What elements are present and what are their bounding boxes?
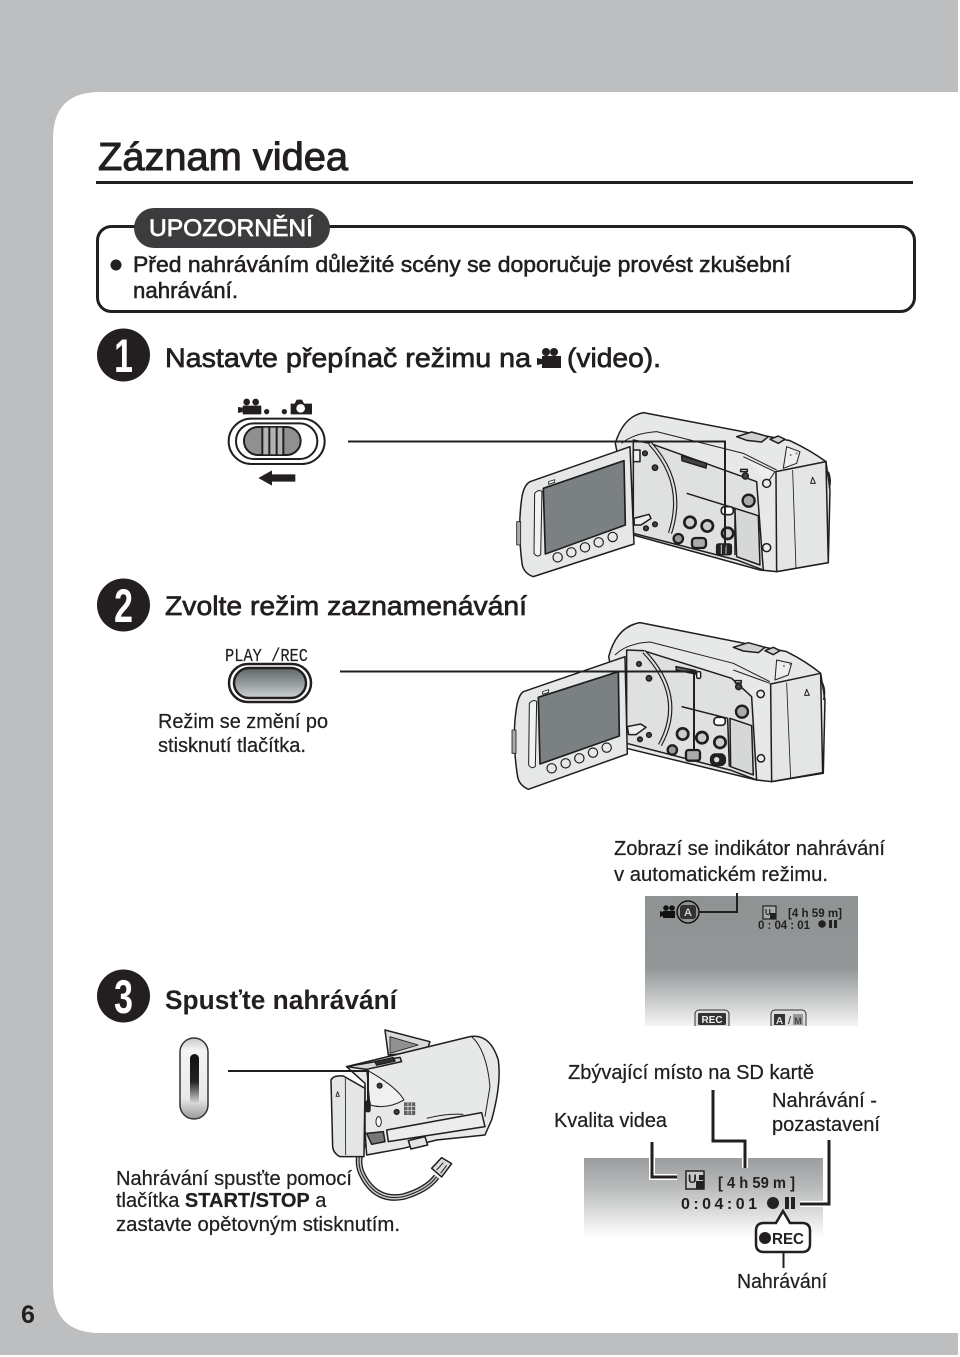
camcorder 1 <box>517 413 830 577</box>
step 2 description <box>158 711 328 757</box>
REC callout: REC <box>772 1231 804 1248</box>
LCD panel <box>520 447 634 577</box>
camcorder 3 <box>331 1030 499 1197</box>
side panel <box>627 650 757 780</box>
icon: video camera <box>660 905 675 918</box>
icon: video camera <box>537 348 561 368</box>
LCD panel <box>514 657 627 789</box>
camera body <box>615 413 830 572</box>
callout lines with halo <box>652 1090 829 1204</box>
pause indicator <box>767 1197 795 1209</box>
arrow <box>258 470 295 486</box>
quality icon <box>763 906 776 919</box>
LCD screen display: auto mode <box>640 896 865 1032</box>
mode switch illustration <box>229 399 325 486</box>
step 2 number: 2 <box>114 580 133 632</box>
icon: video mode <box>238 399 269 414</box>
hand strap pad <box>387 1113 485 1142</box>
step 3 description: tlačítka START/STOP a <box>116 1190 327 1212</box>
camera body <box>609 623 825 782</box>
step 3 number: 3 <box>114 971 133 1023</box>
top controls <box>733 643 765 653</box>
step 1 number <box>97 328 150 382</box>
quality icon: U <box>688 1172 697 1186</box>
LCD screen <box>543 461 625 554</box>
REC callout <box>756 1211 810 1252</box>
indicator description: v automatickém režimu. <box>614 864 828 886</box>
elapsed time: 0 : 0 4 : 0 1 <box>681 1196 757 1213</box>
label: recording pause: pozastavení <box>772 1114 880 1136</box>
callout line 2 <box>340 672 694 750</box>
hinge <box>633 450 640 462</box>
step 3 description: zastavte opětovným stisknutím. <box>116 1214 400 1236</box>
label: remaining SD card space: Zbývající místo na SD kartě <box>568 1062 814 1084</box>
A/M button: / <box>788 1015 792 1027</box>
callout line: indicator <box>699 893 737 912</box>
label: recording: Nahrávání <box>737 1271 827 1293</box>
wrist strap <box>359 1137 437 1197</box>
warning text <box>133 252 791 303</box>
LCD display detail <box>584 1090 829 1238</box>
battery <box>771 673 823 782</box>
step 3 heading: Spusťte nahrávání <box>165 985 398 1015</box>
step 1 heading: Nastavte přepínač režimu na <box>165 343 532 373</box>
panel: warning <box>98 208 914 312</box>
elapsed time: 0 : 04 : 01 <box>758 920 811 932</box>
step 2 description: Režim se změní po <box>158 711 328 733</box>
start/stop button on camera <box>366 1101 370 1112</box>
A/M button <box>771 1010 806 1030</box>
A/M button: M <box>794 1016 802 1026</box>
step 2 description: stisknutí tlačítka. <box>158 735 306 757</box>
auto mode indicator: A <box>684 907 692 919</box>
indicator description <box>614 838 885 886</box>
step 3 number <box>97 970 150 1023</box>
side panel <box>633 440 763 570</box>
icon: photo mode <box>282 400 312 414</box>
callout line 3 <box>228 1071 368 1110</box>
top controls <box>737 432 768 442</box>
callout line: recording <box>782 1252 784 1268</box>
step 1 heading <box>165 343 661 373</box>
battery <box>331 1076 365 1157</box>
warning label pill <box>134 208 330 248</box>
PLAY/REC button <box>229 664 311 702</box>
hinge <box>627 724 646 735</box>
quality icon: U <box>765 908 771 917</box>
title: Záznam videa <box>98 136 348 179</box>
step 1 number: 1 <box>114 330 133 382</box>
label: recording pause <box>772 1090 880 1136</box>
step 2 number <box>97 578 150 632</box>
label: video quality: Kvalita videa <box>554 1110 668 1132</box>
switch body <box>229 419 325 464</box>
PLAY/REC label: PLAY /REC <box>225 647 308 667</box>
page number: 6 <box>21 1301 35 1329</box>
remaining time: [ 4 h 59 m ] <box>718 1175 795 1192</box>
battery <box>776 462 828 572</box>
LCD buttons <box>547 743 611 773</box>
warning text: nahrávání. <box>133 278 238 303</box>
warning bullet <box>110 260 122 270</box>
warning text: Před nahráváním důležité scény se doporučuje provést zkušební <box>133 252 791 277</box>
auto mode indicator <box>677 901 699 923</box>
LCD screen <box>538 672 619 764</box>
pause indicator <box>818 920 837 928</box>
step 3 description: Nahrávání spusťte pomocí <box>116 1168 352 1190</box>
step 2 heading: Zvolte režim zaznamenávání <box>165 591 528 621</box>
callout line 1 <box>348 442 725 547</box>
LCD buttons <box>553 532 617 562</box>
camcorder 2 <box>512 623 825 789</box>
indicator description: Zobrazí se indikátor nahrávání <box>614 838 885 860</box>
step 3 description <box>116 1168 400 1236</box>
quality icon <box>686 1171 704 1189</box>
START/STOP button <box>180 1038 208 1119</box>
warning label pill: UPOZORNĚNÍ <box>149 215 313 242</box>
camera body <box>347 1036 499 1155</box>
LCD panel behind <box>385 1030 430 1055</box>
REC button: REC <box>701 1015 723 1026</box>
REC button <box>695 1010 729 1030</box>
label: recording pause: Nahrávání - <box>772 1090 877 1112</box>
remaining time: [4 h 59 m] <box>788 908 842 920</box>
step 1 heading: (video). <box>567 343 661 373</box>
top controls <box>347 1057 402 1069</box>
A/M button: A <box>776 1016 783 1027</box>
